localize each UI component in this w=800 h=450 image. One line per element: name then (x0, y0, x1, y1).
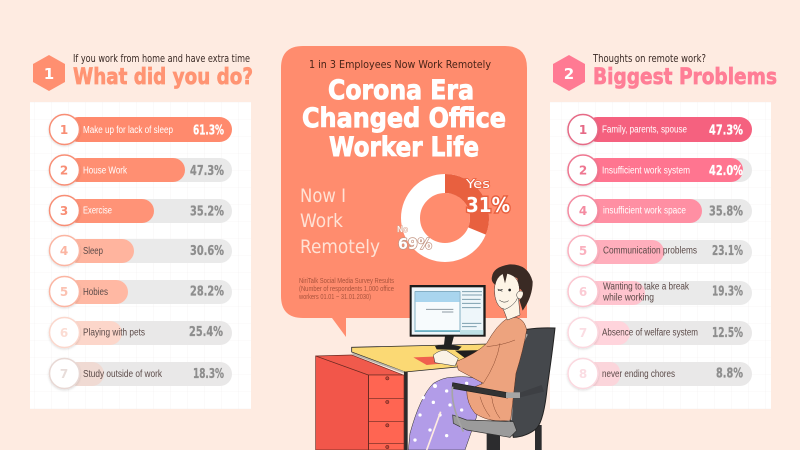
donut chart: remote work share: 31% (466, 193, 510, 217)
side statement: Remotely (300, 236, 380, 258)
row 2: insufficient work system: 2 (579, 164, 587, 178)
row 4: communication problems: 23.1% (712, 244, 743, 259)
panel: central speech bubble (281, 46, 527, 337)
row 3: insufficient work space: insufficient work space (603, 206, 686, 216)
row 6: playing with pets: 25.4% (189, 325, 223, 340)
row 4: sleep: 4 (60, 244, 68, 258)
side statement (300, 185, 380, 258)
row 7: never ending chores: 8 (579, 367, 587, 381)
panel: biggest problems (550, 52, 777, 409)
row 6: absence of welfare system: Absence of welfare system (602, 328, 698, 338)
row 4: communication problems: Communication problems (603, 246, 697, 256)
row 5: wanting to take a break: 19.3% (712, 284, 743, 300)
heading: biggest problems: Thoughts on remote work? (592, 52, 706, 65)
row 5: wanting to take a break (568, 276, 752, 306)
row 1: family, parents, spouse: Family, parents, spouse (602, 124, 687, 136)
row 5: wanting to take a break: 6 (579, 285, 587, 299)
row 1: make up for lack of sleep: Make up for lack of sleep (83, 125, 173, 136)
row 3: exercise (50, 196, 232, 226)
row 7: never ending chores (568, 358, 752, 388)
row 1: family, parents, spouse (568, 114, 752, 144)
drawer cabinet (316, 355, 404, 450)
row 1: make up for lack of sleep (50, 114, 232, 144)
side statement: Now I (300, 185, 346, 207)
row 7: study outside of work: 18.3% (193, 367, 224, 382)
heading: biggest problems: 2 (564, 65, 574, 83)
row 3: insufficient work space: 4 (579, 204, 587, 218)
row 7: study outside of work: Study outside of work (83, 369, 163, 380)
row 3: insufficient work space: 35.8% (709, 204, 743, 220)
row 4: communication problems (568, 236, 752, 266)
main title: Worker Life (329, 132, 479, 163)
grid card: right list (550, 102, 771, 409)
row 4: communication problems: 5 (579, 244, 587, 258)
row 3: exercise: 35.2% (190, 204, 224, 220)
row 3: insufficient work space (568, 196, 752, 226)
person (408, 264, 533, 450)
donut chart: remote work share: 69% (398, 235, 432, 253)
row 6: playing with pets (50, 318, 232, 348)
dark keyboard shadow (455, 350, 488, 361)
row 4: sleep: Sleep (83, 246, 103, 257)
row 7: never ending chores: 8.8% (716, 366, 743, 382)
row 5: hobbies: Hobies (83, 287, 108, 298)
main title: Corona Era (328, 75, 474, 106)
row 4: sleep (50, 236, 232, 266)
grid card: left list (30, 102, 251, 409)
heading: what did you do: If you work from home and have extra time (73, 52, 250, 65)
heading: what did you do (33, 52, 253, 91)
row 1: make up for lack of sleep: 1 (60, 123, 68, 137)
row 2: insufficient work system: Insufficient work system (602, 166, 690, 176)
row 6: absence of welfare system: 7 (579, 326, 587, 340)
row 6: playing with pets: Playing with pets (83, 328, 145, 338)
eye and smile (498, 289, 503, 291)
row 2: house work: 2 (60, 164, 68, 178)
row 4: sleep: 30.6% (190, 244, 224, 259)
heading: biggest problems (553, 52, 777, 91)
row 5: wanting to take a break: Wanting to take a break (603, 282, 690, 292)
row 2: house work (50, 155, 232, 185)
row 7: study outside of work: 7 (60, 367, 68, 381)
hair (492, 264, 533, 311)
source note (298, 278, 394, 301)
row 2: insufficient work system: 42.0% (709, 164, 743, 179)
heading: what did you do: What did you do? (73, 65, 253, 90)
main title: Changed Office (302, 103, 506, 134)
donut chart: remote work share (397, 177, 510, 253)
row 3: exercise: 3 (60, 204, 68, 218)
row 1: make up for lack of sleep: 61.3% (193, 124, 224, 138)
row 1: family, parents, spouse: 47.3% (709, 124, 743, 138)
donut chart: remote work share: No (397, 225, 408, 234)
trousers (408, 377, 482, 450)
panel: what did you do (30, 52, 253, 409)
row 7: never ending chores: never ending chores (602, 369, 675, 380)
source note: (Number of respondents 1,000 office (299, 286, 394, 293)
row 6: absence of welfare system (568, 318, 752, 348)
main title (302, 75, 506, 163)
side statement: Work (300, 210, 343, 232)
source note: workers 01.01 ~ 31.01.2030) (298, 294, 371, 301)
row 1: family, parents, spouse: 1 (579, 123, 587, 137)
donut chart: remote work share: Yes (465, 177, 490, 191)
chair back and legs (487, 328, 555, 450)
kicker: 1 in 3 Employees Now Work Remotely (309, 58, 491, 71)
illustration: remote worker at desk (316, 264, 555, 450)
row 2: house work: 47.3% (190, 164, 224, 179)
row 5: wanting to take a break: while working (602, 292, 654, 304)
row 5: hobbies: 5 (60, 285, 68, 299)
row 5: hobbies (50, 276, 232, 306)
row 5: hobbies: 28.2% (190, 284, 224, 300)
neck and face (500, 297, 520, 320)
row 2: insufficient work system (568, 155, 752, 185)
row 2: house work: House Work (83, 166, 128, 176)
source note: NiriTalk Social Media Survey Results (299, 278, 394, 285)
desk (352, 344, 488, 450)
row 7: study outside of work (50, 358, 232, 388)
torso (456, 317, 527, 421)
chair seat and armrest (452, 383, 544, 437)
monitor (410, 285, 486, 350)
row 6: absence of welfare system: 12.5% (712, 326, 743, 341)
heading: what did you do: 1 (44, 65, 54, 83)
row 3: exercise: Exercise (83, 206, 112, 216)
row 6: playing with pets: 6 (60, 326, 68, 340)
hand and mouse (433, 350, 458, 366)
